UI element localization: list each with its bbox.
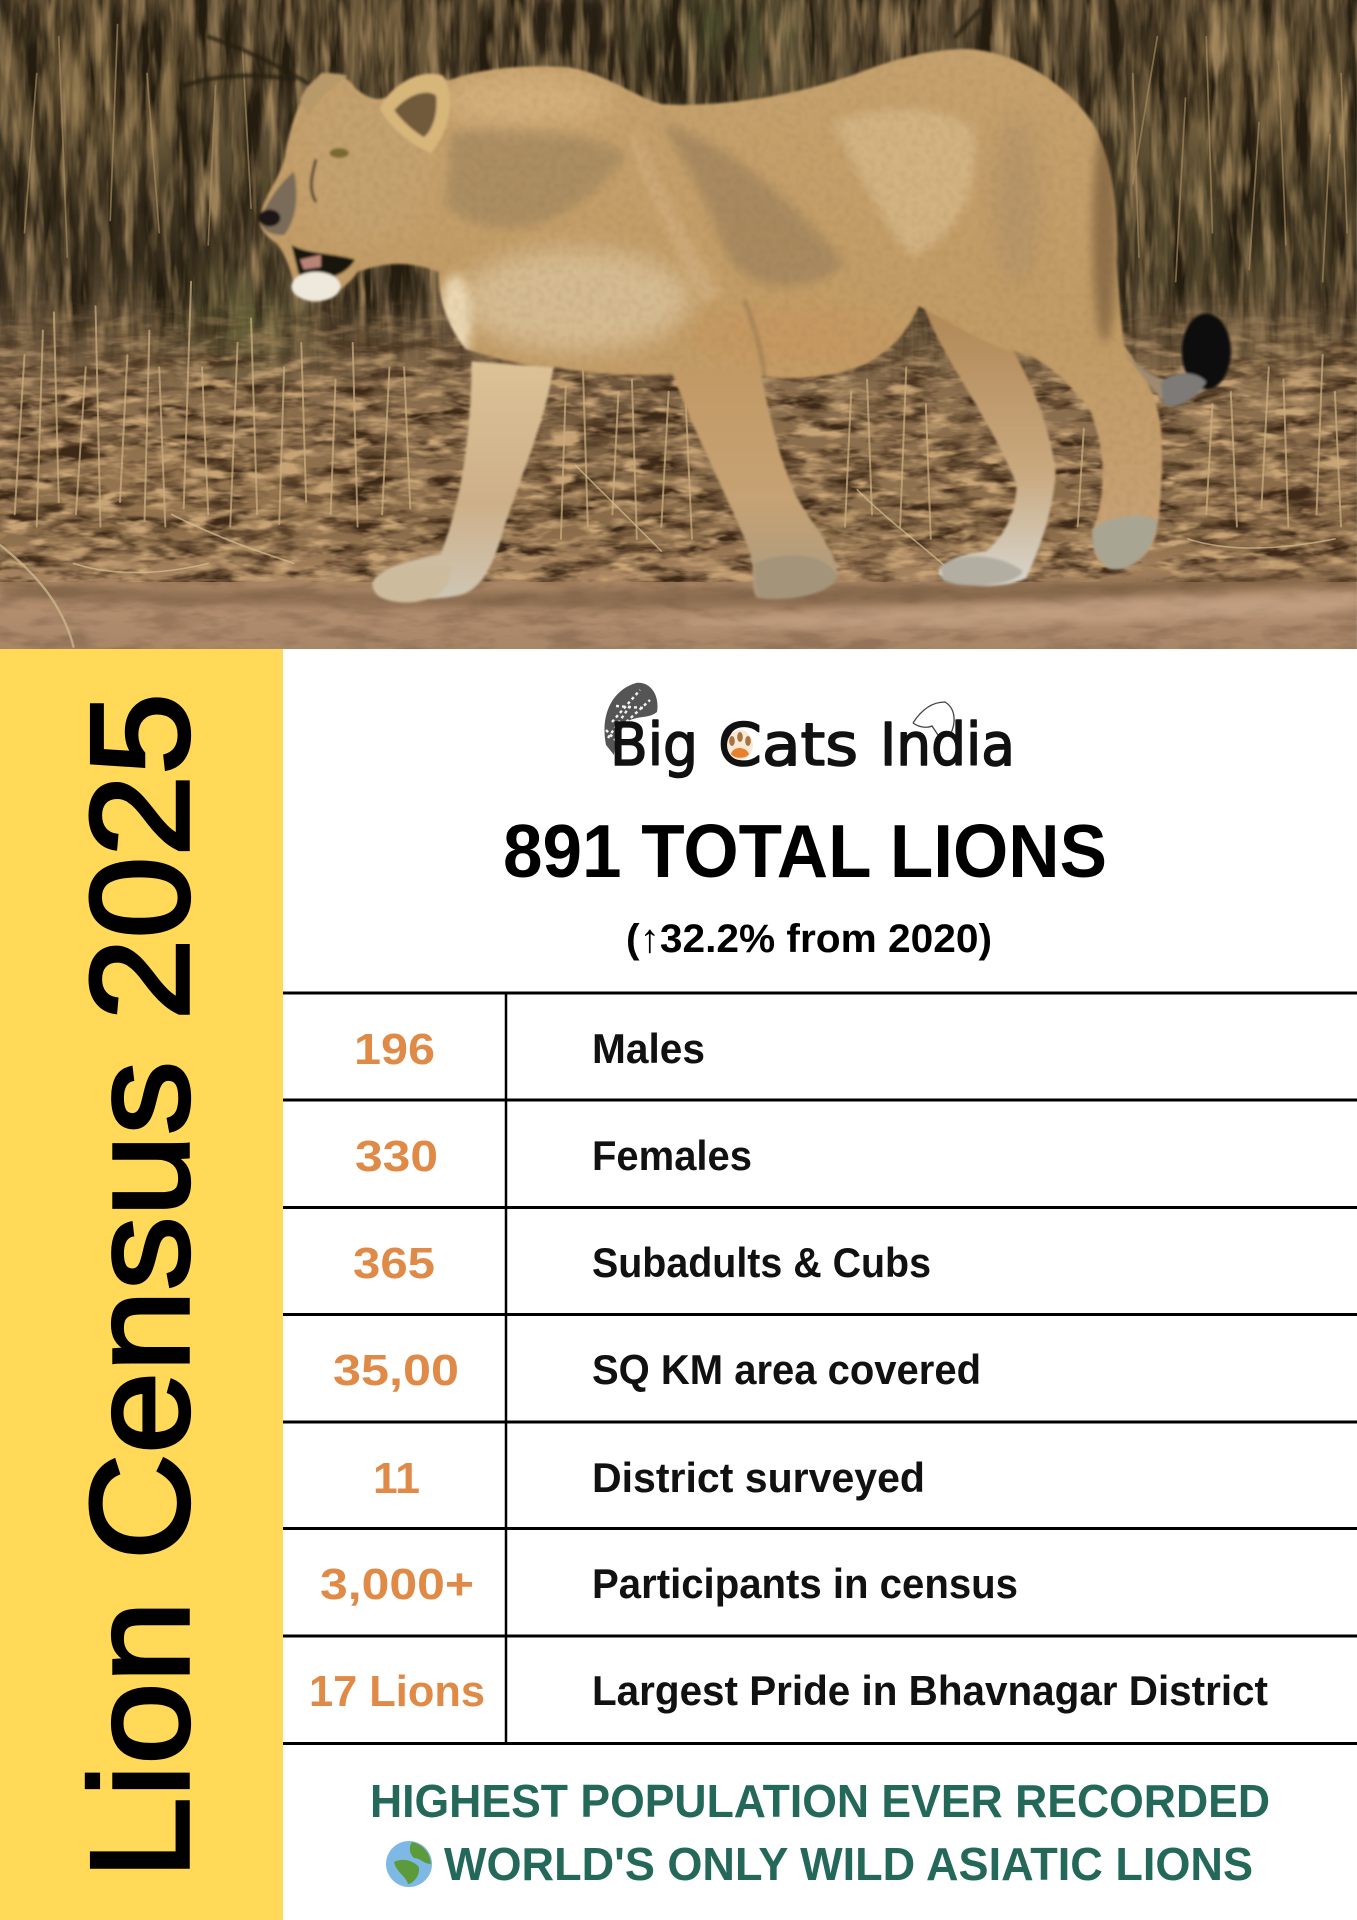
- fur light and shadow modelling: [290, 78, 1154, 494]
- row: subadults and cubs: [353, 1239, 931, 1288]
- row: largest pride: 17 Lions: [309, 1667, 485, 1716]
- row: districts: 11: [373, 1454, 420, 1503]
- row: largest pride: [309, 1667, 1268, 1716]
- row: males: 196: [354, 1025, 435, 1074]
- tail and black tuft: [1126, 354, 1209, 400]
- icon: globe: [386, 1841, 432, 1887]
- logo wordmark: Big: [610, 710, 698, 779]
- paws: [372, 564, 451, 603]
- photo: Asiatic lioness walking through dry grass: [0, 0, 1357, 649]
- logo wordmark: India: [880, 710, 1015, 779]
- row: subadults and cubs: Subadults & Cubs: [592, 1239, 931, 1286]
- face: [260, 171, 296, 235]
- row: area covered: [333, 1346, 981, 1395]
- logo wordmark: Cats: [718, 710, 858, 779]
- dry grass stalks: [0, 10, 1347, 647]
- icon: leopard head: [604, 683, 658, 755]
- yellow sidebar: [0, 649, 283, 1920]
- ears: [300, 74, 348, 118]
- lioness figure: [245, 37, 1231, 603]
- near front leg: [672, 367, 838, 597]
- subheading: (↑32.2% from 2020): [626, 917, 992, 961]
- row: females: 330: [355, 1132, 438, 1181]
- table grid: [283, 993, 1357, 1744]
- row: area covered: 35,00: [333, 1346, 459, 1395]
- row: districts: [373, 1454, 925, 1503]
- far hind leg: [921, 300, 1056, 586]
- footer callout: [370, 1775, 1270, 1890]
- row: participants: 3,000+: [320, 1560, 474, 1609]
- logo wordmark: [610, 710, 1015, 779]
- row: females: Females: [592, 1132, 752, 1179]
- sidebar title: Lion Census 2025: [61, 693, 218, 1879]
- statistics table: [283, 993, 1357, 1744]
- row: females: [355, 1132, 752, 1181]
- body and head: [260, 49, 1162, 570]
- footer line one: HIGHEST POPULATION EVER RECORDED: [370, 1775, 1270, 1827]
- row: largest pride: Largest Pride in Bhavnagar District: [592, 1667, 1268, 1714]
- icon: lion sketch: [913, 702, 954, 735]
- footer line two: WORLD'S ONLY WILD ASIATIC LIONS: [444, 1838, 1253, 1890]
- row: males: [354, 1025, 705, 1074]
- logo: Big Cats India: [604, 683, 1015, 779]
- photo background: scrub and ground: [0, 0, 1357, 649]
- row: participants: [320, 1560, 1018, 1609]
- headline: 891 TOTAL LIONS: [503, 809, 1107, 893]
- far front leg: [372, 361, 554, 599]
- row: males: Males: [592, 1025, 705, 1072]
- row: subadults and cubs: 365: [353, 1239, 435, 1288]
- row: area covered: SQ KM area covered: [592, 1346, 981, 1393]
- icon: paw print: [727, 730, 753, 760]
- row: participants: Participants in census: [592, 1560, 1018, 1607]
- row: districts: District surveyed: [592, 1454, 925, 1501]
